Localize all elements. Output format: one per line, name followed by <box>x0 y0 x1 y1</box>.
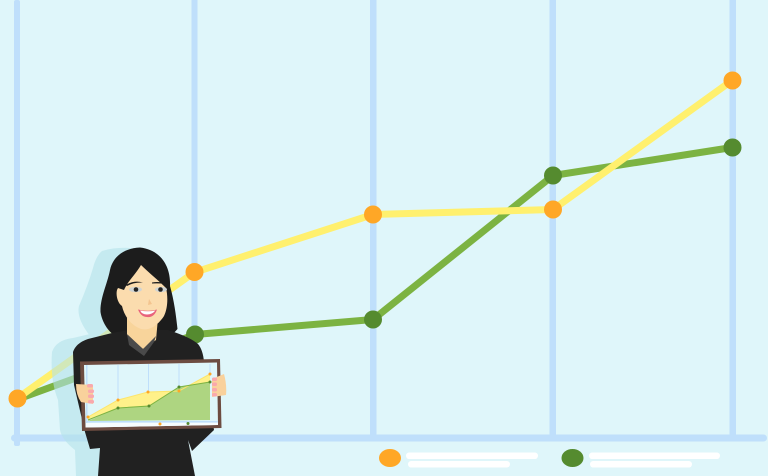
orange data points <box>8 72 742 408</box>
nose <box>148 299 152 305</box>
left brow <box>126 282 143 286</box>
tablet frame <box>80 359 222 431</box>
mini yellow area <box>88 374 210 420</box>
right hand <box>212 374 226 397</box>
neck <box>127 318 158 349</box>
mini yellow line <box>88 374 210 417</box>
left eye <box>129 287 142 292</box>
tablet frame with mini chart <box>80 359 222 431</box>
face <box>117 265 167 329</box>
woman presenter <box>73 248 214 476</box>
legend <box>379 449 720 468</box>
mini orange points <box>86 372 212 426</box>
mini green line <box>88 382 210 420</box>
legend entry: orange series <box>379 449 538 468</box>
back hair <box>100 248 178 335</box>
right eye <box>155 287 167 292</box>
line series: green <box>17 148 732 400</box>
legend entry: green series <box>562 449 720 468</box>
mini green points <box>116 380 212 425</box>
right brow <box>152 282 167 284</box>
mini grid <box>86 364 218 423</box>
tablet screen <box>84 362 218 428</box>
presenter shadow <box>52 248 132 476</box>
line series: yellow <box>17 80 732 398</box>
left hand <box>76 384 94 404</box>
green data points <box>186 138 742 344</box>
torso and arms <box>73 330 214 476</box>
collar <box>127 334 156 356</box>
mouth <box>138 310 157 317</box>
mini green area <box>88 382 210 421</box>
screen bottom strip <box>86 421 218 428</box>
